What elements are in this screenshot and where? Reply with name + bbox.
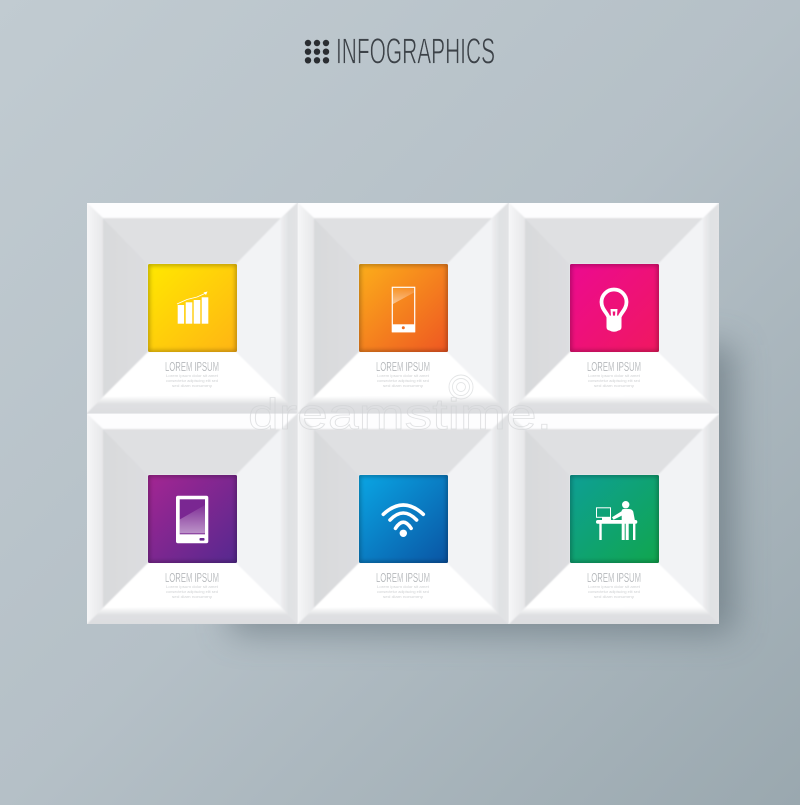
- label: Lorem ipsum dolor sit amet: [588, 373, 641, 378]
- label: Lorem ipsum dolor sit amet: [166, 584, 219, 589]
- label: [165, 359, 219, 388]
- label: [587, 359, 641, 388]
- label: sed diam nonummy: [172, 383, 212, 388]
- label: LOREM IPSUM: [165, 359, 219, 374]
- icon: tablet: [176, 496, 208, 543]
- label: LOREM IPSUM: [587, 359, 641, 374]
- panel: green desk worker: [506, 411, 722, 627]
- watermark: [248, 375, 552, 439]
- label: sed diam nonummy: [172, 594, 212, 599]
- panel: orange phone: [295, 200, 511, 416]
- panel: pink bulb: [506, 200, 722, 416]
- title: [305, 30, 495, 72]
- label: sed diam nonummy: [594, 594, 634, 599]
- icon: person at desk: [596, 501, 637, 540]
- label: consectetur adipiscing elit sed: [166, 589, 218, 594]
- label: sed diam nonummy: [383, 383, 423, 388]
- panel: blue wifi: [295, 411, 511, 627]
- panel drop shadow: [230, 345, 734, 633]
- label: Lorem ipsum dolor sit amet: [166, 373, 219, 378]
- label: [587, 570, 641, 599]
- label: consectetur adipiscing elit sed: [588, 589, 640, 594]
- label: [165, 570, 219, 599]
- label: Lorem ipsum dolor sit amet: [377, 584, 430, 589]
- purple square: [148, 475, 237, 563]
- icon: phone: [392, 287, 415, 332]
- label: sed diam nonummy: [383, 594, 423, 599]
- icon: light bulb: [602, 290, 626, 332]
- pink square: [570, 264, 659, 352]
- label: LOREM IPSUM: [587, 570, 641, 585]
- icon: bar chart: [177, 292, 208, 324]
- panel: yellow chart: [84, 200, 300, 416]
- label: consectetur adipiscing elit sed: [166, 378, 218, 383]
- yellow square: [148, 264, 237, 352]
- panel: purple tablet: [84, 411, 300, 627]
- label: Lorem ipsum dolor sit amet: [588, 584, 641, 589]
- orange square: [359, 264, 448, 352]
- blue square: [359, 475, 448, 563]
- label: [376, 570, 430, 599]
- label: LOREM IPSUM: [376, 359, 430, 374]
- label: sed diam nonummy: [594, 383, 634, 388]
- label: consectetur adipiscing elit sed: [588, 378, 640, 383]
- icon: wifi: [383, 505, 423, 537]
- label: Lorem ipsum dolor sit amet: [377, 373, 430, 378]
- label: consectetur adipiscing elit sed: [377, 589, 429, 594]
- watermark text: dreamstime.: [248, 390, 552, 439]
- label: LOREM IPSUM: [376, 570, 430, 585]
- watermark spiral: [449, 375, 473, 399]
- label: [376, 359, 430, 388]
- label: consectetur adipiscing elit sed: [377, 378, 429, 383]
- panel backing: [87, 203, 719, 624]
- label: LOREM IPSUM: [165, 570, 219, 585]
- title text: INFOGRAPHICS: [336, 30, 495, 72]
- icon: dot grid: [305, 40, 329, 64]
- green square: [570, 475, 659, 563]
